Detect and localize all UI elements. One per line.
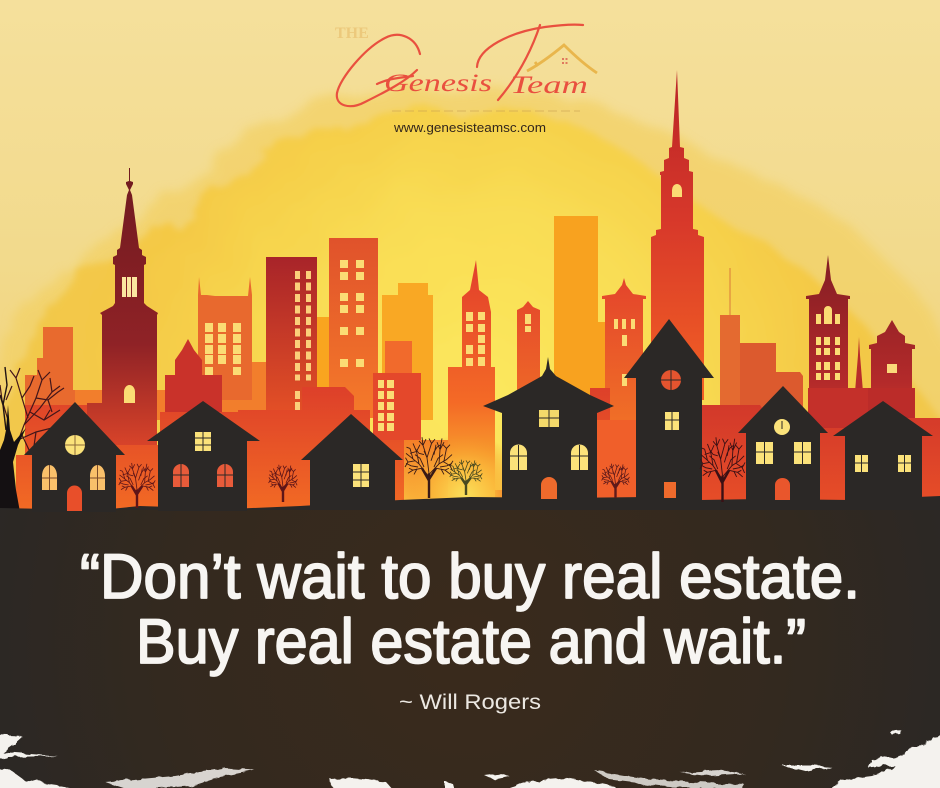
building: small slim tower xyxy=(517,301,540,390)
building: yellow-orange back tower xyxy=(382,283,433,420)
white brush edge xyxy=(0,731,940,788)
building: thin spire xyxy=(855,337,863,392)
building: orange tall with windows xyxy=(329,238,378,418)
building: small orange top xyxy=(385,341,412,381)
small tree 5 xyxy=(602,464,629,498)
quote line 1: “Don’t wait to buy real estate. xyxy=(80,542,860,612)
house 6 clock xyxy=(738,386,828,502)
building: red spire skyscraper xyxy=(651,70,704,400)
house 1 xyxy=(24,402,125,512)
building: cornice tower xyxy=(602,278,646,440)
small tree 1 xyxy=(119,463,155,508)
building: pointed tower centre xyxy=(448,260,495,500)
building: domed tower right xyxy=(869,320,915,440)
small tree 3 xyxy=(405,437,453,498)
building: small red with windows xyxy=(373,373,421,448)
logo: Team xyxy=(510,72,588,99)
horizon glow xyxy=(403,433,527,557)
small tree 4 xyxy=(450,460,482,495)
house 2 xyxy=(147,401,260,511)
building: right back orange stack xyxy=(720,268,803,410)
logo: tagline rule xyxy=(392,110,580,112)
building: yellow-orange skyscraper xyxy=(554,216,605,400)
website url: www.genesisteamsc.com xyxy=(393,120,546,135)
logo: name: Genesis xyxy=(384,70,492,97)
quote panel background xyxy=(0,510,940,788)
ground xyxy=(0,496,940,540)
house 3 xyxy=(301,414,403,510)
building: dark pagoda tower xyxy=(806,255,850,440)
building: left orange block xyxy=(25,327,100,420)
building: dark red tall xyxy=(266,257,317,447)
quote line 2: Buy real estate and wait.” xyxy=(136,607,806,677)
small tree 2 xyxy=(269,465,297,502)
sun watercolor wash xyxy=(0,85,940,520)
house 4 pagoda xyxy=(483,357,614,500)
small tree 6 xyxy=(700,437,745,502)
building: twin-spire office xyxy=(198,277,252,400)
attribution: ~ Will Rogers xyxy=(399,691,541,714)
quote xyxy=(80,542,860,677)
skyline: church xyxy=(87,168,158,460)
house 7 xyxy=(833,401,933,502)
logo: roof icon xyxy=(527,45,597,73)
house 5 tall xyxy=(624,319,714,500)
logo: THE: THE xyxy=(335,25,369,42)
logo: script swashes xyxy=(337,25,583,106)
logo xyxy=(335,25,597,111)
building: low orange band xyxy=(75,362,266,420)
building: chamfered red base xyxy=(238,387,370,450)
left tree xyxy=(0,367,64,512)
skyline: back buildings xyxy=(25,70,915,500)
building: orange back xyxy=(317,317,331,392)
foreground red blocks xyxy=(16,388,940,515)
skyline: small gabled red building xyxy=(165,339,222,430)
sky background xyxy=(0,0,940,520)
